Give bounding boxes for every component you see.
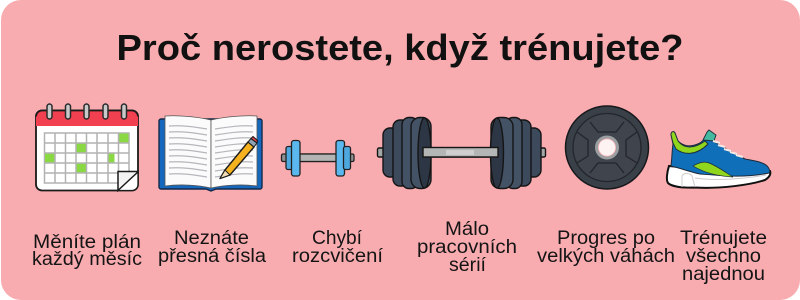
icon: small blue dumbbell — [282, 140, 354, 176]
icon: calendar — [36, 104, 138, 190]
label: Měníte plán každý měsíc: Měníte plán — [33, 232, 141, 253]
icon: barbell — [378, 118, 546, 188]
label: Trénujete všechno najednou: najednou — [682, 264, 765, 285]
label: Neznáte přesná čísla: přesná čísla — [158, 246, 266, 267]
label: Málo pracovních sérií: Málo — [445, 219, 489, 240]
label: Chybí rozcvičení: Chybí — [312, 228, 363, 249]
icon: weight plate — [566, 106, 648, 189]
label: Trénujete všechno najednou: Trénujete — [680, 228, 767, 249]
label: Progres po velkých váhách: Progres po — [557, 228, 655, 249]
label: Trénujete všechno najednou: všechno — [686, 246, 761, 267]
icon: open notebook with pencil — [159, 116, 262, 191]
label: Měníte plán každý měsíc: každý měsíc — [32, 249, 142, 270]
title: Proč nerostete, když trénujete? — [116, 27, 684, 68]
label: Málo pracovních sérií: sérií — [449, 255, 487, 276]
label: Málo pracovních sérií: pracovních — [417, 237, 517, 258]
label: Neznáte přesná čísla: Neznáte — [174, 228, 249, 249]
icon: pencil — [220, 136, 258, 178]
label: Chybí rozcvičení: rozcvičení — [292, 246, 384, 267]
label: Progres po velkých váhách: velkých váhách — [537, 246, 675, 267]
icon: running shoe — [667, 130, 770, 188]
